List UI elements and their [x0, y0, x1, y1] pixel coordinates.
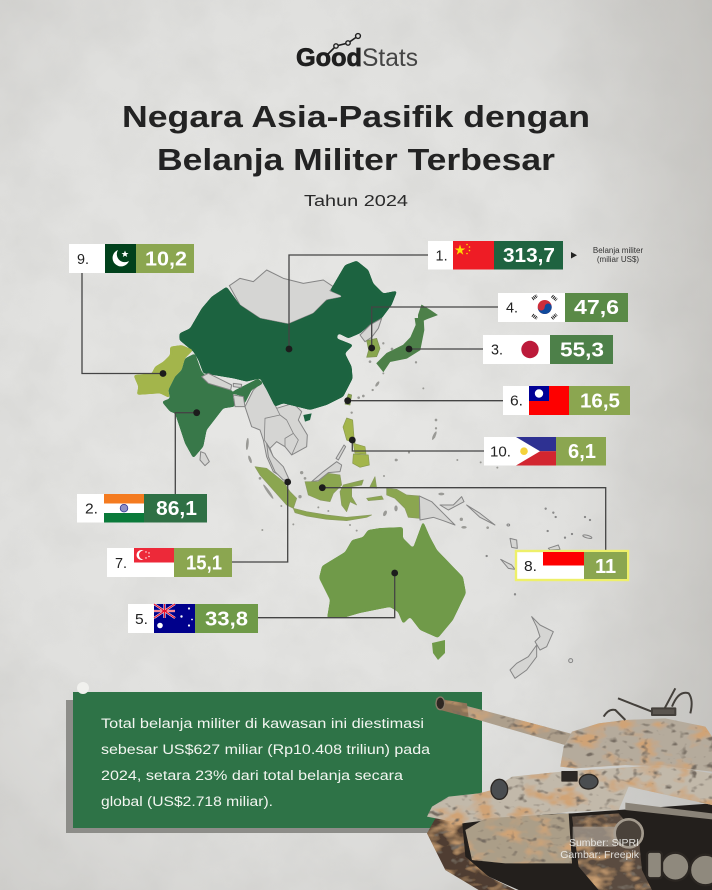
panel: summary — [66, 682, 482, 833]
label 4: South Korea — [498, 293, 628, 322]
Philippines — [343, 418, 369, 467]
label 9: Pakistan: 10,2 — [145, 248, 187, 270]
source credit — [560, 837, 640, 861]
Pacific islands and New Zealand — [486, 508, 592, 678]
Palawan and Papua New Guinea — [336, 445, 495, 525]
logo: GoodStats: Stats — [362, 44, 418, 72]
tank front plate — [465, 813, 572, 863]
leader lines and dots — [82, 255, 606, 618]
country: Australia — [319, 521, 466, 638]
illustration: rusty tank — [427, 688, 712, 890]
legend note: unit: (miliar US$) — [597, 255, 639, 264]
label 10: Philippines: 6,1 — [568, 441, 596, 463]
label 1: China — [428, 241, 563, 270]
label 10: Philippines: 10. — [490, 444, 511, 460]
label 6: Taiwan: 6. — [510, 394, 523, 410]
summary text: 2024, setara 23% dari total belanja secara — [101, 768, 404, 783]
island: Tasmania — [432, 640, 445, 660]
tank tracks — [427, 813, 652, 890]
label 5: Australia — [128, 604, 258, 633]
source credit: Sumber: SIPRI — [569, 837, 639, 849]
logo: GoodStats — [296, 34, 418, 72]
tank track band — [625, 803, 712, 819]
legend note: unit: Belanja militer — [593, 246, 643, 255]
Indonesia main islands — [255, 467, 419, 521]
label 8: Indonesia: 11 — [595, 556, 616, 578]
tank muzzle — [436, 697, 445, 710]
label 9: Pakistan: 9. — [77, 252, 89, 268]
tank hatch and antenna — [604, 688, 692, 720]
countries: Nepal, Bhutan, Bangladesh — [202, 373, 245, 407]
country: China — [179, 261, 397, 410]
title: Belanja Militer Terbesar — [157, 142, 555, 177]
country: Mongolia — [229, 270, 344, 324]
title: Negara Asia-Pasifik dengan — [122, 99, 590, 134]
logo: GoodStats: Good — [296, 44, 362, 72]
label 7: Singapore — [107, 548, 232, 577]
maritime Southeast Asia — [245, 418, 498, 532]
label 8: Indonesia: 8. — [524, 559, 537, 575]
tank turret — [560, 718, 712, 772]
tank road wheels — [647, 852, 712, 885]
label 1: China: 313,7 — [503, 245, 555, 267]
label 2: India: 86,1 — [156, 498, 197, 520]
tank drive sprocket — [615, 819, 643, 847]
country: India — [162, 353, 263, 458]
label 10: Philippines — [484, 437, 606, 466]
label 4: South Korea: 4. — [506, 300, 518, 316]
tank undercarriage — [462, 803, 712, 890]
tank hull — [427, 765, 712, 823]
label 5: Australia: 33,8 — [205, 608, 248, 630]
label 6: Taiwan — [503, 386, 630, 415]
country: mainland Southeast Asia — [200, 382, 307, 480]
tank headlights — [491, 772, 598, 799]
islands: Ryukyu and western Pacific — [246, 342, 437, 462]
label 5: Australia: 5. — [135, 612, 148, 628]
island: Hainan — [303, 413, 312, 422]
summary text — [101, 716, 431, 809]
small islands — [245, 431, 498, 532]
summary text: global (US$2.718 miliar). — [101, 794, 273, 809]
tank front cleats — [573, 827, 616, 847]
map: Asia-Pacific — [133, 261, 592, 678]
label 1: China: 1. — [436, 248, 448, 264]
label 8: Indonesia — [516, 551, 628, 580]
country: Pakistan — [133, 345, 193, 398]
country: North Korea — [360, 318, 382, 342]
label 6: Taiwan: 16,5 — [580, 390, 620, 412]
title — [122, 99, 590, 177]
country: Taiwan — [345, 394, 352, 405]
country: Japan — [377, 305, 437, 372]
label 3: Japan: 3. — [491, 342, 503, 358]
subtitle: Tahun 2024 — [304, 193, 408, 210]
label 4: South Korea: 47,6 — [574, 297, 619, 319]
label 7: Singapore: 15,1 — [186, 552, 222, 574]
summary text: Total belanja militer di kawasan ini diestimasi — [101, 716, 424, 731]
label 2: India — [77, 494, 207, 522]
source credit: Gambar: Freepik — [560, 849, 640, 861]
label 7: Singapore: 7. — [115, 556, 127, 572]
tank barrel — [436, 698, 589, 752]
pin — [77, 682, 89, 694]
summary text: sebesar US$627 miliar (Rp10.408 triliun) pada — [101, 742, 431, 757]
label 2: India: 2. — [85, 502, 98, 518]
country: South Korea — [367, 338, 380, 357]
Malaysian peninsula and north Borneo — [267, 443, 342, 482]
legend note: unit — [571, 246, 643, 264]
label 3: Japan — [483, 335, 613, 364]
label 9: Pakistan — [69, 244, 194, 273]
label 3: Japan: 55,3 — [560, 340, 604, 362]
